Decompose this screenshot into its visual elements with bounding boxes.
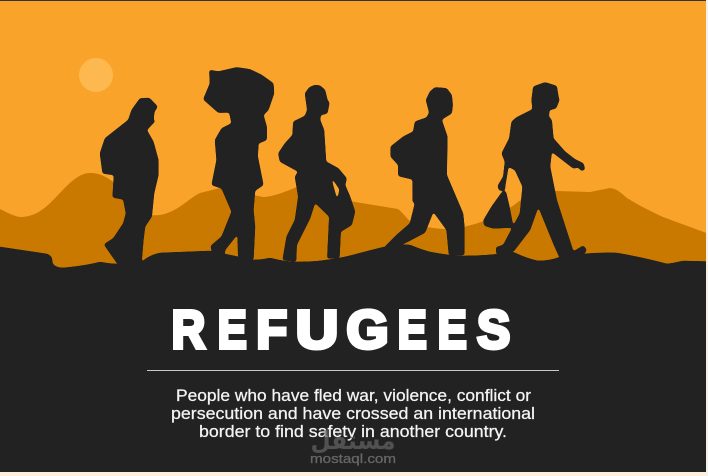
sun [79, 58, 113, 92]
bottom cream edge [0, 472, 708, 476]
person holding bag [278, 85, 355, 262]
hand bag [483, 191, 513, 228]
watermark: مستقل [310, 426, 396, 455]
person with backpack [100, 98, 158, 265]
watermark [310, 426, 396, 466]
sky background [0, 0, 706, 300]
dark ground [0, 245, 708, 476]
person walking with hand bag [496, 82, 587, 258]
title: U [296, 299, 338, 359]
distant hills [0, 173, 708, 290]
title: G [346, 300, 389, 360]
description text [171, 387, 535, 441]
person striding with side bag [383, 87, 464, 255]
title: F [256, 301, 287, 360]
right edge [706, 0, 708, 476]
title: E [398, 301, 427, 360]
title: R [172, 300, 205, 360]
description text: persecution and have crossed an international [171, 405, 535, 423]
divider rule [147, 370, 559, 371]
title [172, 299, 510, 360]
title: E [438, 301, 467, 360]
description text: People who have fled war, violence, conflict or [176, 387, 532, 405]
figures one and two [100, 67, 274, 265]
figure five [483, 82, 587, 258]
title: E [218, 301, 247, 360]
person carrying sack on head [203, 67, 274, 262]
silhouettes: five walking refugees [100, 67, 587, 265]
title: S [477, 299, 510, 359]
top edge line [0, 0, 708, 1]
figures three and four [278, 85, 464, 262]
description text: border to find safety in another country. [199, 423, 507, 441]
watermark: mostaql.com [310, 451, 396, 466]
